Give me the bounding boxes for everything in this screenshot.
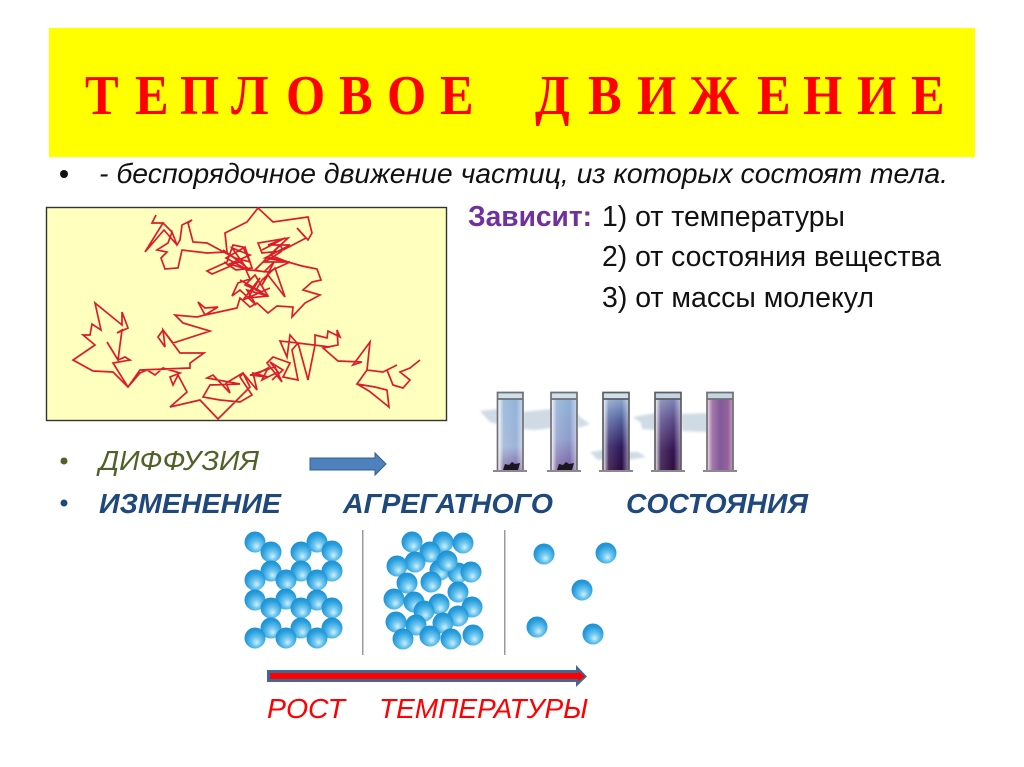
gas state particles (526, 542, 616, 644)
item 2: 2) от состояния вещества (602, 240, 941, 272)
liquid state particles (384, 532, 484, 650)
clouds behind tubes (480, 409, 708, 460)
title text: О (387, 65, 426, 127)
temperature label: ТЕМПЕРАТУРЫ (379, 693, 588, 724)
divider between liquid and gas (504, 530, 506, 655)
title text: Е (135, 65, 169, 127)
title banner (49, 28, 975, 157)
title text: Ж (689, 65, 739, 127)
title text: Н (803, 65, 842, 127)
solid state particles (244, 532, 342, 648)
title text: В (339, 65, 373, 127)
state change label: ИЗМЕНЕНИЕ (99, 488, 282, 519)
label: depends on: Зависит: (468, 200, 592, 232)
state change label: АГРЕГАТНОГО (342, 488, 553, 519)
divider between solid and liquid (362, 530, 364, 655)
diffusion test tubes (480, 392, 737, 472)
tube 5 (703, 392, 737, 472)
arrow: temperature growth (267, 665, 587, 687)
title text: Т (85, 65, 119, 127)
temperature label: РОСТ (267, 693, 347, 724)
title text: Е (440, 65, 474, 127)
title text: Л (231, 65, 269, 127)
dependence list (468, 200, 941, 313)
tube 3 (599, 392, 633, 472)
diffusion label: ДИФФУЗИЯ (96, 445, 260, 476)
definition line: - беспорядочное движение частиц, из которых состоят тела. (99, 158, 948, 189)
title text: О (286, 65, 325, 127)
title text: И (637, 65, 676, 127)
title text: Д (535, 65, 570, 127)
temperature label (267, 693, 588, 724)
title text: И (857, 65, 896, 127)
title text: Е (911, 65, 945, 127)
state change label: СОСТОЯНИЯ (626, 488, 809, 519)
title text: В (588, 65, 622, 127)
trajectory line (73, 208, 420, 419)
state change label (60, 488, 809, 519)
item 1: 1) от температуры (602, 200, 845, 232)
arrow: diffusion (310, 453, 386, 475)
tube 2 (547, 392, 581, 472)
item 3: 3) от массы молекул (602, 281, 874, 313)
title text: Е (757, 65, 791, 127)
particles diagram (244, 530, 616, 655)
tube 4 (651, 392, 685, 472)
panel: brownian motion trajectory (46, 208, 446, 420)
tube 1 (493, 392, 527, 472)
title text: П (180, 65, 219, 127)
